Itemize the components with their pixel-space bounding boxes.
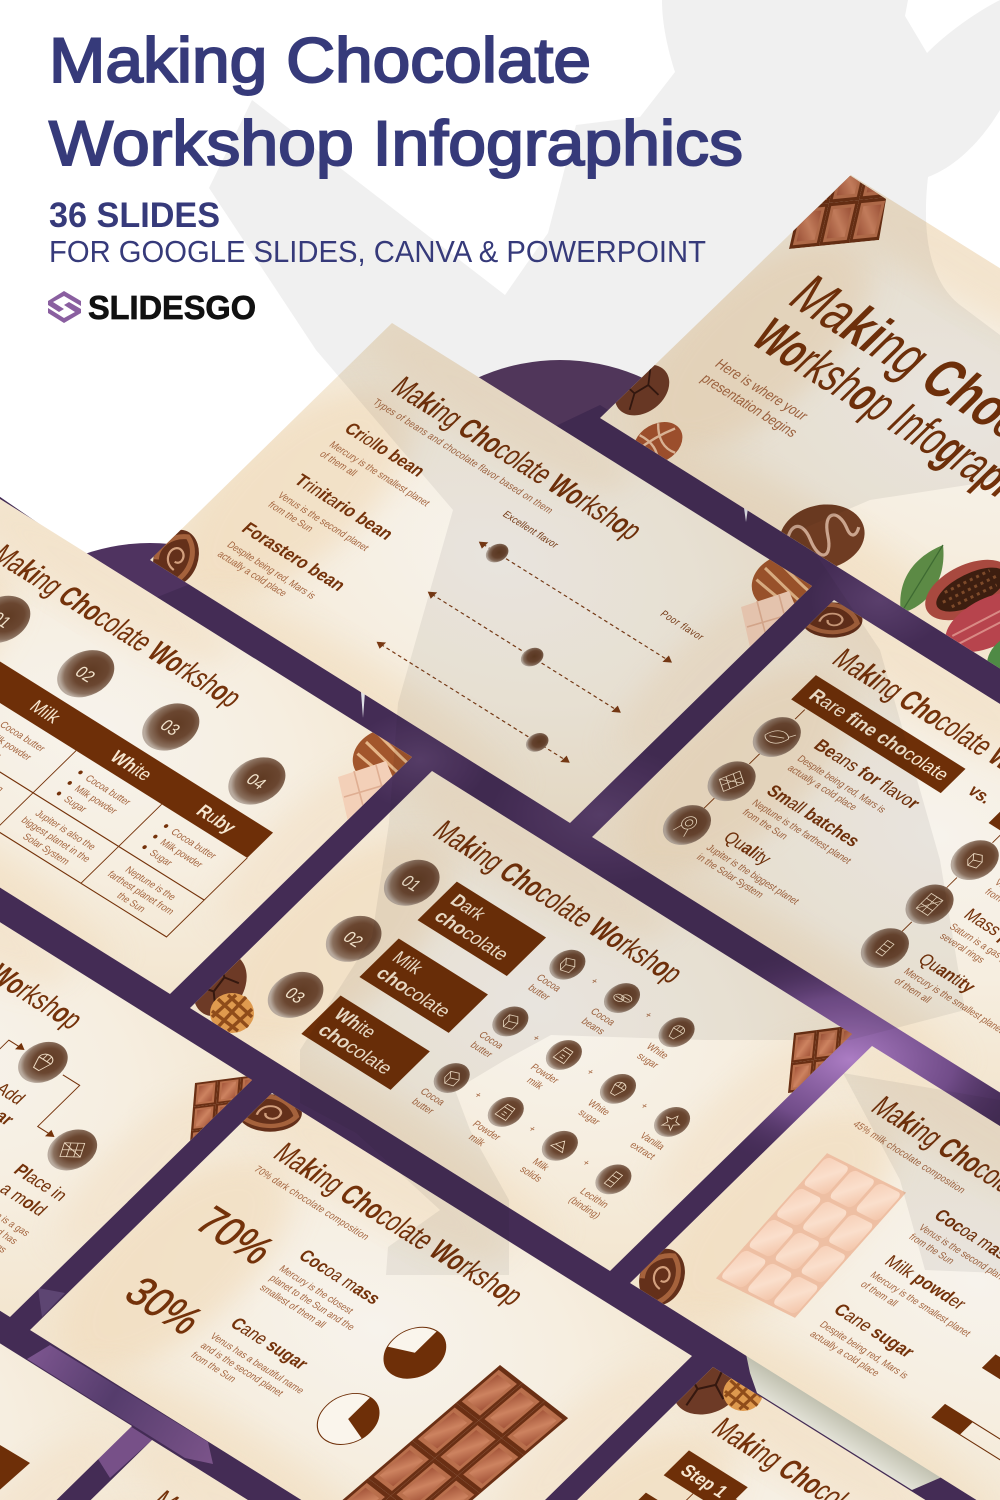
row 3 heading: white chocolate: chocolate (314, 1020, 397, 1078)
panel: milk chocolate composition slide (576, 1024, 1000, 1500)
rare item: batches: Small batches (762, 781, 865, 851)
panel: steps slide (417, 1345, 1000, 1500)
mass item: quantity: of them all (891, 976, 933, 1006)
dark chocolate ingredients: Cocoa (533, 973, 564, 995)
cane sugar text: Venus has a beautiful name (207, 1331, 306, 1396)
milk chocolate ingredients: sugar (575, 1108, 603, 1128)
ruby cell: Cocoa butter (168, 827, 219, 862)
open cacao pod (925, 560, 1000, 620)
comparison content (651, 641, 1000, 1052)
milk chocolate ingredients: Cocoa (476, 1030, 506, 1052)
row 1 heading: dark chocolate: 01 (397, 872, 426, 895)
versus label: vs. (964, 781, 997, 807)
mass item: quantity: Quantity (914, 949, 981, 997)
white chocolate ingredients: butter (409, 1097, 437, 1117)
flavour slide content (218, 376, 704, 763)
bean type: Trinitario (268, 473, 392, 552)
connector ticks (704, 710, 1000, 932)
row 3 heading: white chocolate: 03 (281, 984, 309, 1007)
cocoa mass text: Cocoa mass (294, 1245, 386, 1308)
white chocolate bar (716, 1153, 906, 1318)
step connector (675, 1481, 765, 1500)
number badges: 03 (156, 716, 185, 739)
logo wordmark: SLIDESGO (88, 289, 256, 326)
white chocolate ingredients: + (525, 1124, 539, 1135)
bean type: Criollo: Criollo bean (340, 418, 430, 480)
white cell: Milk powder (72, 784, 120, 817)
bean type: Forastero: Despite being red, Mars is (224, 540, 318, 602)
rare item: quality (651, 797, 820, 917)
milk chocolate ingredients: Powder (528, 1062, 562, 1087)
flavour arrow 2 (428, 592, 621, 713)
white chocolate ingredients: + (579, 1158, 593, 1169)
cane sugar text (806, 1299, 931, 1391)
bean type: Trinitario: from the Sun (265, 500, 316, 534)
red cacao pod (946, 594, 1000, 652)
row 1 heading: dark chocolate: Dark (446, 890, 490, 924)
milk chocolate ingredients: + (583, 1067, 597, 1078)
axis label: excellent: Excellent flavor (500, 509, 561, 551)
pie chart 70 percent (371, 1318, 458, 1388)
white chocolate decoration (338, 761, 406, 831)
row 3 heading: white chocolate (254, 963, 433, 1090)
cocoa mass text (906, 1204, 1000, 1296)
bean type: Forastero: actually a cold place (214, 549, 289, 599)
mass item: production: several rings (937, 931, 987, 966)
rare item: beans: Beans for flavor (810, 735, 925, 813)
panel: process slide (0, 795, 289, 1373)
row 3 heading: white chocolate: White (330, 1004, 381, 1042)
mass item: quantity (848, 921, 1000, 1045)
truffle decoration (752, 560, 812, 609)
bean type: Trinitario: Venus is the second planet (275, 490, 371, 554)
milk powder text: Milk powder (880, 1251, 971, 1313)
dark chocolate ingredients: beans (578, 1016, 607, 1037)
silhouette: chocolate bunny (209, 0, 1000, 1275)
chocolate bar decoration (189, 1074, 264, 1155)
row 2 heading: milk chocolate: Milk (388, 947, 428, 978)
compatibility line: FOR GOOGLE SLIDES, CANVA & POWERPOINT (49, 234, 706, 269)
white cell: biggest planet in the (18, 815, 93, 865)
cane sugar text (188, 1310, 328, 1415)
main title line 1: Making Chocolate (49, 26, 591, 96)
truffle decoration (345, 719, 427, 793)
milk powder text (858, 1251, 993, 1349)
number badges: 02 (71, 663, 100, 686)
rare item: beans (742, 707, 925, 836)
slide subtitle: Types of beans and chocolate flavor based on them (370, 397, 555, 516)
stat: 70 percent: 70% (186, 1198, 284, 1273)
cane sugar text: Cane sugar (226, 1313, 313, 1373)
milk powder text: of them all (858, 1279, 900, 1309)
white chocolate ingredients: Powder (469, 1119, 504, 1143)
white chocolate ingredients: solids (517, 1164, 544, 1185)
rare fine chocolate banner (791, 675, 966, 793)
pie chart 30 percent (305, 1384, 392, 1454)
chocolate bar decoration (788, 1024, 863, 1093)
milk chocolate ingredients (464, 1000, 698, 1163)
cocoa mass text: from the Sun (906, 1232, 957, 1267)
white chocolate ingredients: Milk (529, 1157, 551, 1173)
white chocolate ingredients: + (471, 1090, 484, 1101)
row 2 heading: milk chocolate (313, 907, 490, 1033)
composition content (108, 1135, 530, 1462)
step 2 box (621, 1493, 705, 1500)
slide count: 36 SLIDES (49, 196, 220, 235)
column names: Milk (25, 696, 65, 727)
slide title: Making Chocolate Workshop (384, 371, 649, 547)
axis label: poor: Poor flavor (657, 609, 707, 643)
steps content (621, 1412, 969, 1500)
cane sugar text: and is the second planet (197, 1341, 286, 1399)
cracked truffle decoration (183, 944, 257, 1026)
types content (252, 814, 791, 1221)
step 1 box (664, 1450, 748, 1500)
mass item: production (894, 876, 1000, 1005)
column names (30, 700, 236, 834)
cover chocolate bar (789, 176, 886, 249)
white chocolate ingredients: (binding) (566, 1195, 603, 1221)
grey gap behind white chocolate slide (746, 1354, 942, 1490)
panel: bottom left slide (0, 1343, 132, 1500)
mass banner (989, 799, 1000, 917)
white cell: Cocoa butter (82, 773, 134, 808)
cocoa mass text: smallest of them all (257, 1283, 328, 1330)
waffle decoration (210, 993, 254, 1033)
panel: chocolate types slide (136, 749, 889, 1327)
white chocolate ingredients: milk (466, 1132, 487, 1149)
bean type: Criollo: Mercury is the smallest planet (326, 440, 432, 509)
table header (0, 662, 273, 858)
cracked truffle decoration (666, 1352, 748, 1424)
purple backdrop (0, 360, 1000, 1500)
panel: comparison table slide (0, 499, 412, 994)
milk powder text: Mercury is the smallest planet (867, 1270, 973, 1339)
rare item: batches: Neptune is the farthest planet (749, 798, 854, 867)
cane sugar text: from the Sun (188, 1350, 238, 1385)
rare item: beans: Despite being red, Mars is (794, 754, 888, 816)
rare fine chocolate banner: Rare fine chocolate (804, 685, 954, 784)
mass item: beans (939, 831, 1000, 950)
row 1 heading: dark chocolate (371, 851, 548, 976)
cover text (698, 275, 1000, 497)
cover subtitle: Here is where your (712, 357, 812, 423)
cocoa mass text: Mercury is the closest (276, 1264, 356, 1317)
white cell: Jupiter is also the (32, 808, 98, 853)
table slide content (0, 544, 286, 938)
big swirl truffle (781, 504, 865, 566)
ruby cell: farthest planet from (105, 869, 176, 917)
bean type: Criollo: of them all (317, 449, 359, 479)
cover subtitle: presentation begins (698, 371, 801, 440)
panel: flavour scale slide (150, 323, 812, 823)
rare item: batches: from the Sun (739, 807, 790, 842)
ruby cell: Sugar (146, 848, 175, 869)
cup decoration (802, 602, 862, 638)
milk composition content (702, 1090, 1000, 1500)
milk chocolate ingredients: butter (467, 1040, 495, 1061)
main title line 2: Workshop Infographics (49, 109, 743, 179)
milk chocolate ingredients: Vanilla (637, 1131, 667, 1153)
dark chocolate ingredients: White (643, 1041, 671, 1062)
cup decoration (238, 1094, 302, 1132)
rare item: quality: Jupiter is the biggest planet (703, 843, 802, 907)
dark chocolate ingredients: sugar (634, 1051, 661, 1071)
icon: slidesgo mark (48, 291, 81, 323)
dark chocolate ingredients: Cocoa (588, 1006, 618, 1028)
second leaf (987, 640, 1000, 668)
stat: 30 percent: 30% (115, 1269, 213, 1343)
slide subtitle: 45% milk chocolate composition (850, 1119, 968, 1196)
flavour arrow 3 (376, 642, 570, 763)
white chocolate ingredients (406, 1057, 641, 1221)
bean type: Forastero: Forastero bean (237, 518, 351, 595)
dark chocolate ingredients (522, 944, 702, 1073)
column names: Ruby (192, 801, 241, 837)
column names: White (106, 747, 157, 784)
white chocolate decoration (741, 591, 794, 647)
slide title: Making Chocolate Workshop (266, 1138, 530, 1312)
ruby cell (95, 819, 228, 927)
step: place in a mold (0, 1118, 116, 1258)
row 1 heading: dark chocolate: chocolate (430, 906, 514, 964)
cane sugar text: Cane sugar (829, 1299, 920, 1361)
white cell (9, 765, 144, 874)
white chocolate ingredients: Lecithin (577, 1186, 611, 1211)
milk chocolate ingredients: White (585, 1098, 612, 1118)
number badges (0, 596, 286, 805)
swirl decoration (153, 530, 199, 582)
cane sugar text: Despite being red, Mars is (817, 1319, 911, 1381)
cacao leaf (900, 545, 944, 613)
panel: dark chocolate composition slide (0, 1071, 729, 1500)
header (49, 26, 743, 269)
dark chocolate ingredients: butter (525, 983, 553, 1003)
panel: cover slide (600, 175, 1000, 668)
ruby cell: Milk powder (157, 837, 205, 871)
panel: bottom middle slide (90, 1440, 248, 1500)
brown label box (0, 1445, 30, 1490)
ruby cell: Neptune is the (122, 865, 178, 903)
milk chocolate ingredients: extract (627, 1140, 658, 1162)
flavour arrow 1 (478, 542, 672, 663)
slide title: Making Chocolate Workshop (426, 815, 690, 990)
row 2 heading: milk chocolate: 02 (339, 928, 368, 951)
number badges: 04 (242, 770, 271, 793)
cocoa mass text (257, 1243, 388, 1342)
milk chocolate ingredients: + (638, 1101, 651, 1112)
rare item: beans: actually a cold place (785, 763, 859, 813)
rare item: quality: in the Solar System (694, 852, 766, 900)
milk chocolate ingredients: + (529, 1033, 543, 1044)
striped truffle (636, 422, 682, 460)
cracked truffle (616, 365, 670, 416)
cup decoration (631, 1242, 693, 1312)
cocoa mass text: planet to the Sun and the (266, 1273, 357, 1333)
white cell: Solar System (20, 832, 72, 867)
row 2 heading: milk chocolate: chocolate (372, 963, 456, 1021)
progress bars (932, 1355, 1000, 1500)
rare item: quality: Quality (719, 827, 777, 869)
rare item: batches (696, 753, 872, 876)
slide subtitle: 70% dark chocolate composition (251, 1164, 371, 1243)
waffle decoration (723, 1375, 763, 1411)
white chocolate ingredients: Cocoa (417, 1086, 448, 1108)
milk cell (0, 722, 45, 792)
dark chocolate ingredients: + (588, 976, 601, 987)
white cell: Sugar (61, 794, 90, 815)
panel: rare vs mass slide (538, 578, 1000, 1156)
cane sugar text: actually a cold place (807, 1329, 882, 1379)
ruby cell: the Sun (114, 891, 148, 915)
milk chocolate bar (324, 1365, 568, 1500)
dark chocolate ingredients: + (642, 1010, 655, 1021)
process content (0, 861, 191, 1258)
step: place in a mold: Place in (9, 1160, 72, 1205)
bean type: Trinitario: Trinitario bean (290, 470, 399, 544)
step: add sugar (0, 1033, 78, 1129)
process arrows (0, 1037, 100, 1140)
milk chocolate ingredients: milk (524, 1075, 546, 1092)
logo (48, 289, 256, 326)
table grid (0, 750, 248, 938)
